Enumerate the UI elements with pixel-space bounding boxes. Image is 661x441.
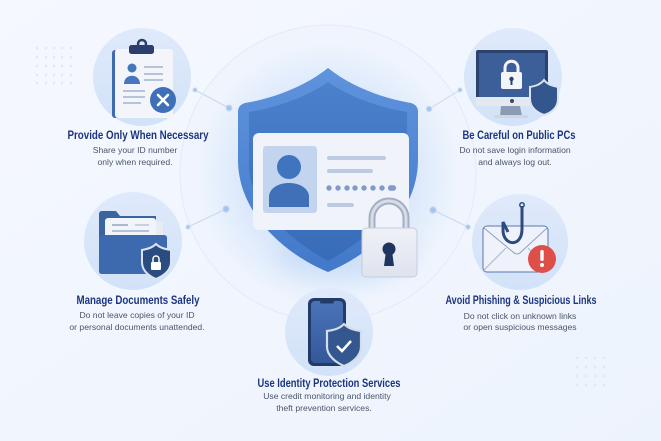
connector: bottom right [430,207,470,229]
connector: top left [193,88,232,111]
card number dots [326,185,396,191]
icon: folder [84,192,182,290]
icon: phone [285,288,373,376]
title: identity: Use Identity Protection Services [258,378,400,390]
icon: clipboard [93,28,191,126]
description: public pcs: and always log out. [478,157,552,167]
dot grid: bottom right [576,357,605,386]
ID card [253,133,409,230]
description: identity [263,391,391,413]
description: provide: Share your ID number [93,145,177,155]
description: public pcs [459,145,571,167]
description: phishing: Do not click on unknown links [464,311,576,321]
description: manage: or personal documents unattended. [69,322,205,332]
description: provide [93,145,177,167]
description: phishing [463,311,577,332]
central shield [238,68,418,272]
icon: monitor [464,28,562,126]
description: identity: theft prevention services. [276,403,372,413]
dot grid: top left [36,47,72,84]
description: phishing: or open suspicious messages [463,322,577,332]
icon: phishing envelope [472,194,568,290]
connector: top right [426,88,462,112]
card text lines [327,156,386,207]
description: identity: Use credit monitoring and identity [263,391,391,401]
card photo [263,146,317,213]
description: manage: Do not leave copies of your ID [79,310,195,320]
description: provide: only when required. [97,157,173,167]
description: public pcs: Do not save login information [459,145,571,155]
connector: bottom left [186,206,229,229]
central glow [180,25,476,321]
title: phishing: Avoid Phishing & Suspicious Links [446,295,596,307]
title: public pcs: Be Careful on Public PCs [462,130,576,142]
title: provide: Provide Only When Necessary [68,130,209,142]
description: manage [69,310,205,332]
padlock [362,201,417,277]
title: manage: Manage Documents Safely [76,295,200,307]
